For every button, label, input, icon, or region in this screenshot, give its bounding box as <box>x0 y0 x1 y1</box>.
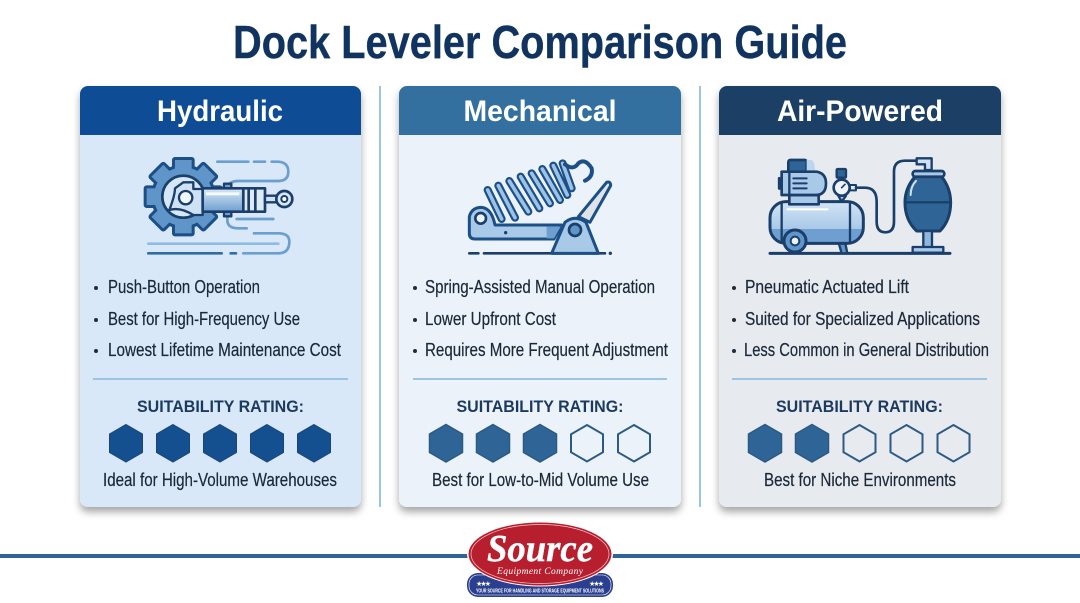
icon: hydraulic gear and cylinder <box>147 160 292 253</box>
feature list: Air-Powered <box>732 277 989 360</box>
icon: spring lever <box>469 161 612 255</box>
logo: Source Equipment Company: Equipment Company <box>496 567 584 577</box>
caption: Hydraulic: Ideal for High-Volume Warehouses <box>103 470 337 490</box>
header: Mechanical <box>399 86 681 135</box>
panel: Air-Powered <box>719 86 1001 507</box>
feature list: Mechanical: Spring-Assisted Manual Operation <box>425 277 655 297</box>
icon: air compressor and tank <box>770 158 951 253</box>
rating hexagons: 2 of 5 <box>748 424 970 462</box>
feature list: Air-Powered: Suited for Specialized Applications <box>745 309 980 329</box>
logo banner: ★★★ <box>589 580 604 588</box>
panel: Mechanical <box>399 86 681 507</box>
rating hexagons: 5 of 5 <box>110 424 330 462</box>
logo banner: YOUR SOURCE FOR HANDLING AND STORAGE EQUIPMENT SOLUTIONS <box>476 588 604 594</box>
logo: Source Equipment Company: Source <box>487 528 593 570</box>
rating heading: Hydraulic: SUITABILITY RATING: <box>137 398 304 416</box>
header: Air-Powered: Air-Powered <box>777 95 943 128</box>
header: Hydraulic <box>80 86 361 135</box>
rating heading: Air-Powered: SUITABILITY RATING: <box>776 398 943 416</box>
divider: left <box>379 86 381 507</box>
title: Dock Leveler Comparison Guide <box>233 16 847 68</box>
footer rule <box>0 554 1080 558</box>
panel: Hydraulic <box>80 86 361 507</box>
feature list: Hydraulic: Best for High-Frequency Use <box>108 309 300 329</box>
caption: Mechanical: Best for Low-to-Mid Volume Use <box>432 470 649 490</box>
feature list: Hydraulic <box>94 277 341 360</box>
divider: right <box>699 86 701 507</box>
feature list: Hydraulic: Push-Button Operation <box>108 277 260 297</box>
header: Hydraulic: Hydraulic <box>157 95 283 128</box>
feature list: Hydraulic: Lowest Lifetime Maintenance Cost <box>108 340 341 360</box>
header: Air-Powered <box>719 86 1001 135</box>
feature list: Mechanical: Requires More Frequent Adjustment <box>425 340 668 360</box>
caption: Air-Powered: Best for Niche Environments <box>764 470 956 490</box>
logo banner <box>467 573 613 597</box>
feature list: Air-Powered: Less Common in General Distribution <box>744 340 989 360</box>
feature list: Mechanical <box>413 277 668 360</box>
rating heading: Mechanical: SUITABILITY RATING: <box>456 398 624 416</box>
logo: Source Equipment Company <box>467 522 613 597</box>
feature list: Mechanical: Lower Upfront Cost <box>425 309 556 329</box>
rating hexagons: 3 of 5 <box>430 424 650 462</box>
header: Mechanical: Mechanical <box>464 95 616 128</box>
logo banner: ★★★ <box>476 580 491 588</box>
feature list: Air-Powered: Pneumatic Actuated Lift <box>745 277 909 297</box>
